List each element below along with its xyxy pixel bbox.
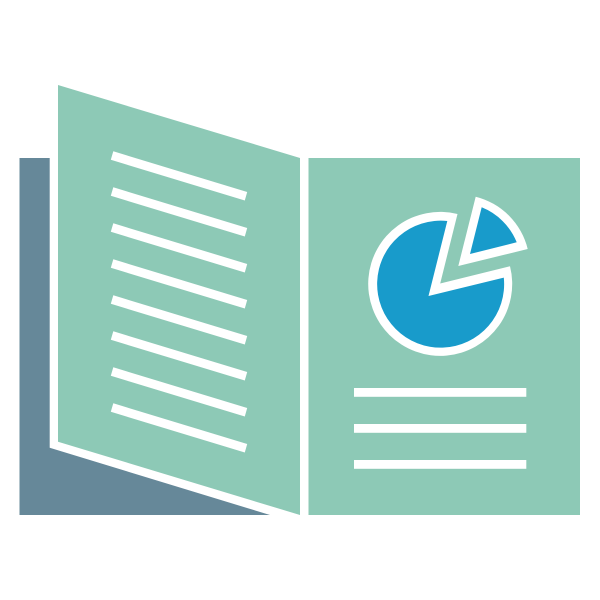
- right page: [308, 158, 580, 515]
- pie chart: [368, 197, 528, 356]
- right page text lines: [354, 388, 526, 469]
- main pie slice: [368, 212, 512, 356]
- book back cover: [20, 158, 270, 515]
- detached pie slice: [458, 197, 528, 266]
- left page text lines: [111, 151, 247, 453]
- left page: [58, 85, 300, 515]
